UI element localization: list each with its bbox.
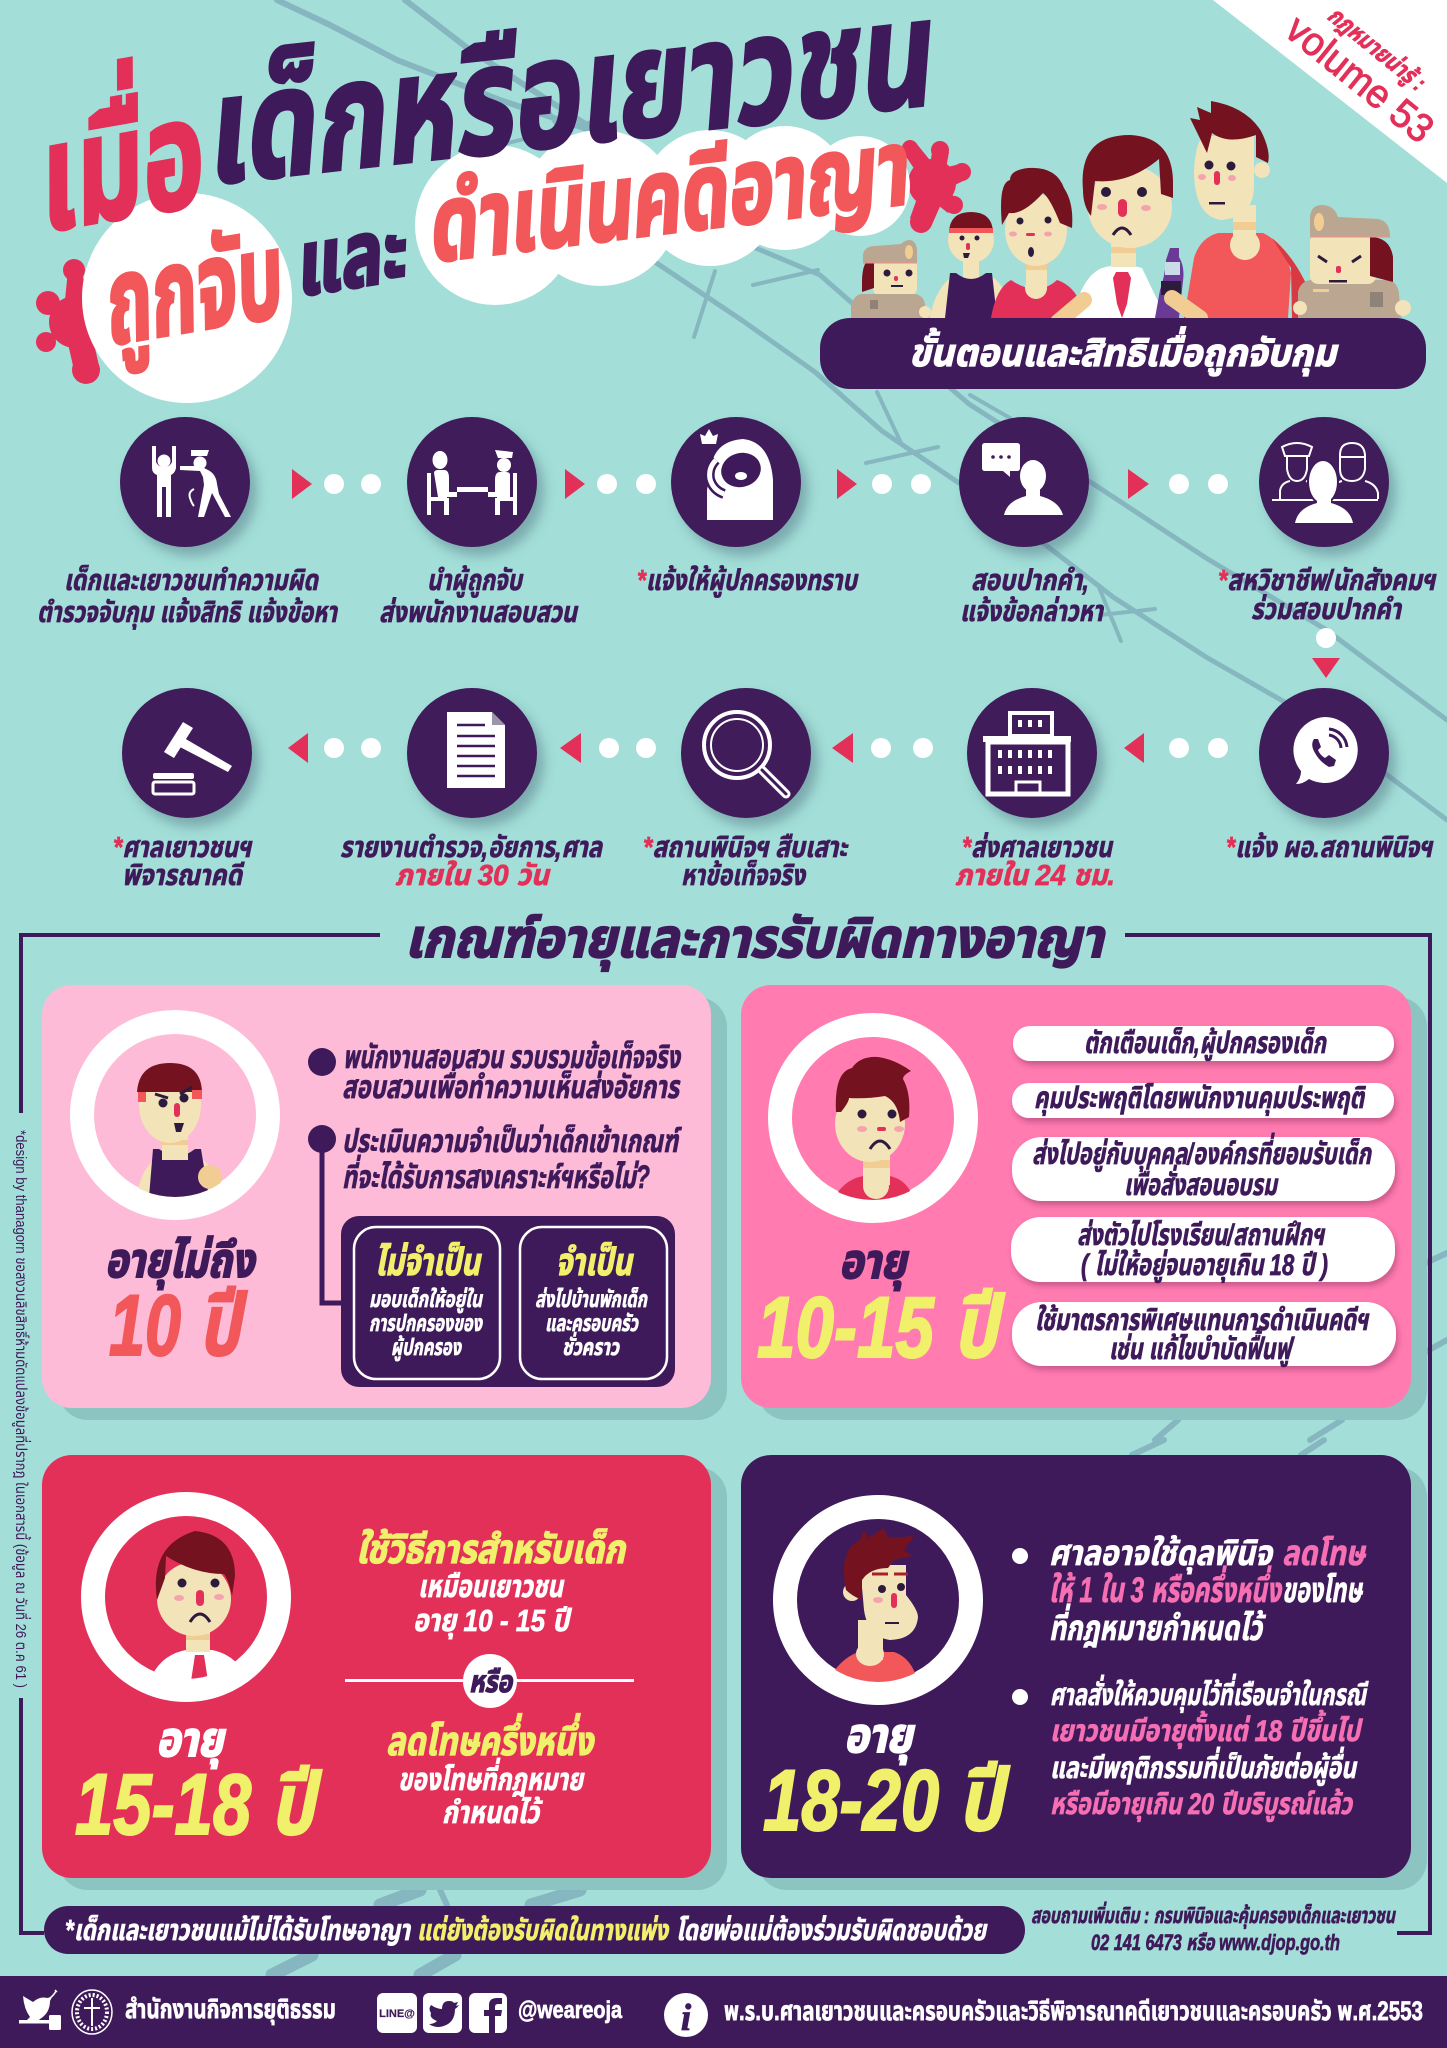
- decision box: [341, 1216, 675, 1387]
- step 9 label: ภายใน 30 วัน: [395, 860, 551, 892]
- option: necessary: ส่งไปบ้านพักเด็ก: [535, 1286, 648, 1312]
- panel: 15-18 years: [42, 1455, 711, 1878]
- detention text: และมีพฤติกรรมที่เป็นภัยต่อผู้อื่น: [1050, 1746, 1358, 1786]
- option: necessary: และครอบครัว: [545, 1310, 639, 1336]
- step labels bottom row: [113, 832, 1434, 892]
- option: not necessary: [354, 1227, 500, 1379]
- banner text: ขั้นตอนและสิทธิเมื่อถูกจับกุม: [909, 326, 1339, 377]
- court discretion text: ของโทษ: [1282, 1571, 1364, 1610]
- banner: steps and rights: [820, 318, 1426, 389]
- note text: แต่ยังต้องรับผิดในทางแพ่ง: [417, 1915, 669, 1947]
- icon: magnifier: [704, 712, 786, 794]
- step 7 label: [955, 832, 1115, 892]
- age value: 10-15 ปี: [757, 1280, 1005, 1376]
- step 10 label: [113, 832, 253, 892]
- title splat right: [902, 140, 971, 233]
- detention text: [1050, 1673, 1369, 1822]
- pill text: เพื่อสั่งสอนอบรม: [1124, 1163, 1279, 1202]
- investigator text: [342, 1039, 682, 1195]
- reduced penalty heading: ลดโทษครึ่งหนึ่ง: [386, 1713, 595, 1764]
- title: [15, 0, 971, 403]
- white cloud behind prosecution: [415, 126, 910, 305]
- step 7 label: *ส่งศาลเยาวชน: [962, 832, 1114, 864]
- court discretion text: ให้ 1 ใน 3 หรือครึ่งหนึ่ง: [1049, 1565, 1282, 1610]
- icon: document: [447, 712, 505, 788]
- icon: notifying guardian: [700, 429, 773, 520]
- arrow markers bottom row: [288, 658, 1340, 763]
- icon: line: [377, 1993, 417, 2033]
- corner ribbon: volume 53: [1213, 0, 1447, 183]
- icon: gavel: [153, 722, 232, 794]
- icon: questioning: [982, 443, 1063, 515]
- step 3 label: *แจ้งให้ผู้ปกครองทราบ: [637, 565, 859, 598]
- note text: [65, 1915, 988, 1947]
- contact info: [1031, 1901, 1396, 1955]
- panel: under 10 years: [42, 985, 711, 1408]
- icon: officer interview: [427, 450, 517, 515]
- icon: line: LINE@: [379, 2008, 415, 2020]
- step 10 label: พิจารณาคดี: [122, 860, 245, 892]
- step 9 label: รายงานตำรวจ,อัยการ,ศาล: [340, 832, 603, 864]
- pill text: ( ไม่ให้อยู่จนอายุเกิน 18 ปี ): [1081, 1249, 1328, 1283]
- arrow markers top row: [292, 469, 1149, 499]
- court discretion text: ศาลอาจใช้ดุลพินิจ: [1049, 1534, 1274, 1575]
- method detail: เหมือนเยาวชน: [418, 1569, 565, 1604]
- icon: facebook: [469, 1993, 507, 2033]
- age value: 10 ปี: [109, 1278, 248, 1374]
- title splat left: [36, 259, 101, 384]
- avatar: young man: [828, 1528, 918, 1682]
- bullet two: [308, 1125, 336, 1153]
- bullet one: [308, 1048, 336, 1076]
- age value: 15-18 ปี: [75, 1757, 322, 1853]
- step 5 label: [1218, 565, 1437, 626]
- option: necessary: จำเป็น: [556, 1242, 634, 1284]
- step 1 label: ตำรวจจับกุม แจ้งสิทธิ แจ้งข้อหา: [37, 597, 338, 630]
- method detail: อายุ 10 - 15 ปี: [413, 1603, 573, 1640]
- barbed wire background: [272, 0, 1447, 1975]
- social handle: @weareoja: [518, 1997, 623, 2024]
- age label: อายุ: [839, 1236, 910, 1291]
- step 7 label: ภายใน 24 ชม.: [955, 860, 1115, 892]
- avatar: angry boy: [137, 1063, 222, 1197]
- connector: [322, 1139, 342, 1303]
- detention text: หรือมีอายุเกิน 20 ปีบริบูรณ์แล้ว: [1050, 1788, 1353, 1822]
- flow arrows and dots: [288, 469, 1340, 763]
- icon: office seal: [72, 1990, 112, 2034]
- icon: phone call: [1293, 717, 1358, 784]
- pill text: [1032, 1027, 1372, 1367]
- divider with or: หรือ: [469, 1666, 514, 1699]
- panel: 18-20 years: [741, 1455, 1411, 1878]
- step labels top row: [37, 565, 1437, 630]
- investigator text: ที่จะได้รับการสงเคราะห์ฯหรือไม่?: [342, 1154, 650, 1195]
- dots: [324, 474, 1336, 758]
- step 4 label: แจ้งข้อกล่าวหา: [960, 596, 1104, 628]
- step 2 label: นำผู้ถูกจับ: [427, 565, 524, 598]
- title word: prosecuted: ดำเนินคดีอาญา: [419, 109, 915, 285]
- title word: and: และ: [285, 199, 414, 316]
- contact info: 02 141 6473 หรือ www.djop.go.th: [1091, 1930, 1340, 1955]
- bullet markers: [1012, 1548, 1028, 1705]
- footer: [0, 1976, 1447, 2048]
- court discretion text: ลดโทษ: [1282, 1534, 1367, 1573]
- white circle behind caught: [82, 193, 292, 403]
- process flow step circles: [120, 417, 1389, 818]
- option: not necessary: ไม่จำเป็น: [375, 1242, 482, 1284]
- step 10 label: *ศาลเยาวชนฯ: [113, 832, 253, 864]
- portrait ring: [82, 1022, 268, 1208]
- step 9 label: [340, 832, 603, 892]
- option: not necessary: การปกครองของ: [369, 1310, 483, 1336]
- investigator text: พนักงานสอบสวน รวบรวมข้อเท็จจริง: [343, 1039, 681, 1075]
- portrait ring: [93, 1504, 279, 1690]
- option: necessary: [520, 1227, 667, 1379]
- character: police right: [1293, 205, 1411, 318]
- corner label: law series: กฎหมายน่ารู้ :: [1322, 2, 1431, 98]
- office name: สำนักงานกิจการยุติธรรม: [125, 1994, 336, 2025]
- pill text: ส่งตัวไปโรงเรียน/สถานฝึกฯ: [1077, 1219, 1326, 1252]
- age value: 18-20 ปี: [763, 1753, 1010, 1849]
- vertical credit: *design by thanagorn ขอสงวนลิขสิทธิ์ห้ามดัดแปลงข้อมูลที่ปรากฎ ในเอกสารนี้ (ข้อมูล ณ วันที่ 26 ต.ค 61 ): [12, 1130, 32, 1688]
- note text: โดยพ่อแม่ต้องร่วมรับผิดชอบด้วย: [676, 1915, 988, 1947]
- step 2 label: ส่งพนักงานสอบสวน: [379, 597, 579, 629]
- note text: *เด็กและเยาวชนแม้ไม่ได้รับโทษอาญา: [65, 1915, 411, 1947]
- method heading: ใช้วิธีการสำหรับเด็ก: [356, 1528, 627, 1572]
- icon: arrest: [152, 446, 231, 517]
- character: boy: [930, 212, 1014, 318]
- character: man with tie: [1058, 135, 1173, 322]
- investigator text: ประเมินความจำเป็นว่าเด็กเข้าเกณฑ์: [342, 1123, 682, 1159]
- corner label: volume: volume 53: [1277, 7, 1442, 152]
- pill text: ตักเตือนเด็ก,ผู้ปกครองเด็ก: [1084, 1027, 1327, 1061]
- portrait ring: [780, 1025, 966, 1211]
- investigator text: สอบสวนเพื่อทำความเห็นส่งอัยการ: [342, 1064, 681, 1105]
- option: not necessary: มอบเด็กให้อยู่ใน: [369, 1286, 484, 1314]
- age label: อายุ: [844, 1710, 916, 1765]
- step 1 label: เด็กและเยาวชนทำความผิด: [64, 565, 319, 597]
- reduced penalty detail: ของโทษที่กฎหมาย: [398, 1757, 585, 1797]
- title word: when: เมื่อ: [15, 49, 215, 264]
- frame lines: [21, 935, 1430, 1933]
- characters group: [851, 101, 1411, 322]
- icon: info: [664, 1993, 708, 2039]
- icon: info: i: [681, 1997, 692, 2039]
- method detail: [413, 1569, 573, 1640]
- court discretion text: [1049, 1534, 1367, 1648]
- icon: dove and gavel: [19, 1990, 61, 2030]
- icon: multidisciplinary team: [1272, 443, 1378, 523]
- divider with or: [345, 1654, 634, 1708]
- age label: อายุไม่ถึง: [105, 1235, 256, 1290]
- option: not necessary: ผู้ปกครอง: [391, 1334, 462, 1362]
- reduced penalty detail: [398, 1757, 585, 1830]
- character: tall man: [1184, 101, 1312, 318]
- option pills: [1011, 1026, 1396, 1366]
- step 4 label: สอบปากคำ,: [971, 565, 1089, 597]
- detention text: เยาวชนมีอายุตั้งแต่ 18 ปีขึ้นไป: [1050, 1709, 1363, 1749]
- court discretion text: ที่กฎหมายกำหนดไว้: [1049, 1603, 1266, 1648]
- step 5 label: ร่วมสอบปากคำ: [1251, 594, 1402, 626]
- step 8 label: [643, 832, 849, 892]
- step 4 label: [960, 565, 1104, 628]
- character: police left: [851, 240, 931, 318]
- section heading: เกณฑ์อายุและการรับผิดทางอาญา: [405, 909, 1105, 972]
- character: bottle: [1155, 248, 1200, 318]
- step 1 label: [37, 565, 338, 630]
- title word: arrested: ถูกจับ: [90, 208, 294, 377]
- pill text: เช่น แก้ไขบำบัดฟื้นฟู: [1109, 1327, 1295, 1367]
- step 8 label: *สถานพินิจฯ สืบเสาะ: [643, 832, 849, 864]
- icon: juvenile court building: [983, 713, 1071, 794]
- reduced penalty detail: กำหนดไว้: [442, 1795, 543, 1830]
- panel shadows: [58, 997, 1427, 1890]
- step 8 label: หาข้อเท็จจริง: [681, 860, 806, 892]
- step 2 label: [379, 565, 579, 629]
- note bar: [44, 1906, 1025, 1954]
- avatar: sad girl: [833, 1057, 914, 1200]
- icon: twitter: [423, 1993, 462, 2033]
- character: girl: [991, 168, 1079, 318]
- portrait ring: [785, 1507, 971, 1693]
- panel: 10-15 years: [741, 985, 1411, 1408]
- age label: อายุ: [156, 1714, 227, 1769]
- option: necessary: ชั่วคราว: [562, 1332, 620, 1360]
- avatar: student: [154, 1531, 235, 1679]
